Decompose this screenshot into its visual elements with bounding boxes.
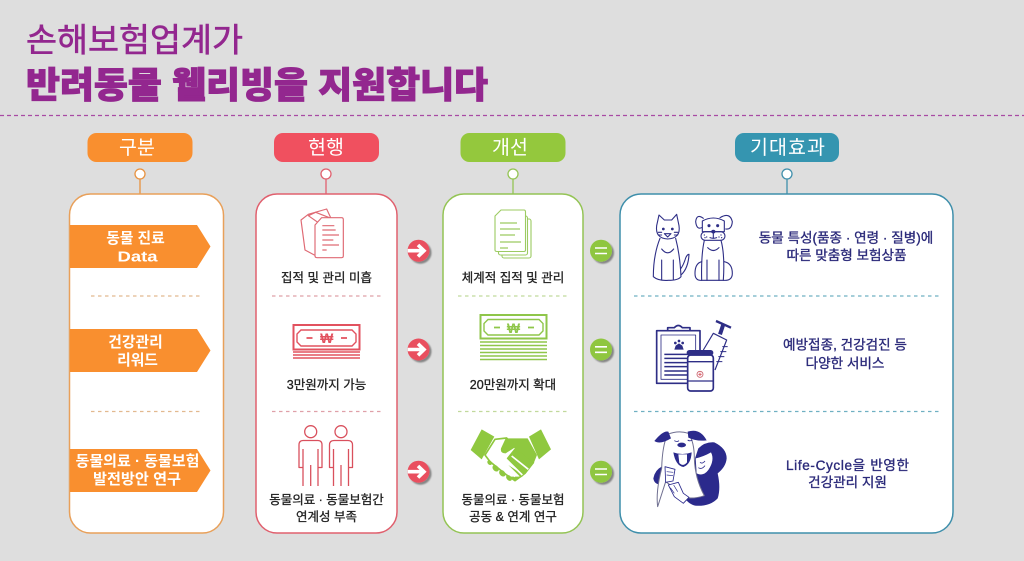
icon: banknotes: ₩ [320, 330, 334, 346]
heading pill: 개선: 개선 [492, 137, 528, 159]
heading pill: 구분 [88, 133, 192, 162]
icon: banknote stack [480, 315, 547, 360]
text: 3만원까지 가능: 3만원까지 가능 [287, 378, 366, 392]
equals: row 3 [590, 461, 612, 483]
row label: 동물의료 동물보험 발전방안 연구: 동물의료 · 동물보험 [76, 453, 200, 470]
connector: column 4 [782, 169, 792, 194]
icon: two people [299, 426, 352, 486]
panel: 현행: 연계성 부족 [296, 510, 357, 524]
text: 체계적 집적 및 관리: 체계적 집적 및 관리 [462, 271, 564, 285]
title: 반려동물 웰리빙을 지원합니다 [26, 64, 488, 106]
icon: cat and dog [653, 214, 732, 280]
arrow: row 1 [408, 240, 430, 262]
row label: 동물의료 동물보험 발전방안 연구 [70, 449, 210, 492]
icon: vaccine records [657, 321, 731, 391]
heading pill: 기대효과 [735, 133, 839, 162]
heading pill: 개선 [460, 133, 566, 162]
heading pill: 현행 [274, 133, 379, 162]
panel: 개선: 공동 & 연계 연구 [469, 510, 557, 524]
row label: 건강관리 리워드 [70, 329, 210, 372]
row label: 건강관리 리워드: 리워드 [117, 352, 158, 369]
panel: 기대효과: 건강관리 지원 [808, 475, 887, 490]
icon: neat documents [495, 210, 531, 258]
title [26, 22, 488, 106]
title: 손해보험업계가 [26, 22, 243, 58]
connector: column 1 [135, 169, 145, 194]
panel: 구분 [70, 194, 224, 533]
text: Life-Cycle 건강관리 지원: Life-Cycle을 반영한 [786, 458, 909, 473]
panel: 기대효과: 다양한 서비스 [806, 356, 884, 371]
row label: 건강관리 리워드: 건강관리 [108, 334, 163, 351]
equals: row 2 [590, 338, 612, 360]
heading pill: 구분: 구분 [119, 137, 155, 159]
text: 동물의료 동물보험 공동 & 연계 연구: 동물의료 · 동물보험 [461, 493, 565, 507]
icon: banknote stack: ₩ [507, 320, 521, 336]
connector: column 2 [321, 169, 331, 194]
panel: 현행 [256, 194, 397, 533]
panel: 개선 [443, 194, 583, 533]
text: 동물 특성 맞춤형 보험상품: 동물 특성(품종 · 연령 · 질병)에 [759, 230, 933, 246]
row label: 동물 진료 Data [70, 225, 210, 268]
panel: 기대효과: 따른 맞춤형 보험상품 [786, 248, 907, 263]
equals: row 1 [590, 240, 612, 262]
panel: 기대효과 [620, 194, 953, 533]
row label: 동물의료 동물보험 발전방안 연구: 발전방안 연구 [93, 471, 181, 488]
text: 예방접종 건강검진 서비스: 예방접종, 건강검진 등 [783, 338, 907, 352]
row label: 동물 진료 Data: Data [118, 250, 158, 266]
icon: banknotes [293, 325, 360, 358]
row label: 동물 진료 Data: 동물 진료 [106, 230, 165, 247]
text: 집적 및 관리 미흡: 집적 및 관리 미흡 [281, 271, 372, 285]
text: 20만원까지 확대: 20만원까지 확대 [470, 378, 556, 392]
heading pill: 현행: 현행 [308, 137, 344, 159]
icon: person hugging dog [653, 431, 727, 507]
heading pill: 기대효과: 기대효과 [750, 137, 825, 159]
icon: scattered documents [301, 209, 343, 258]
arrow: row 3 [408, 461, 430, 483]
connector: column 3 [508, 169, 518, 194]
icon: handshake [471, 429, 551, 482]
text: 동물의료 동물보험간 연계성 부족: 동물의료 · 동물보험간 [269, 493, 384, 507]
arrow: row 2 [408, 338, 430, 360]
